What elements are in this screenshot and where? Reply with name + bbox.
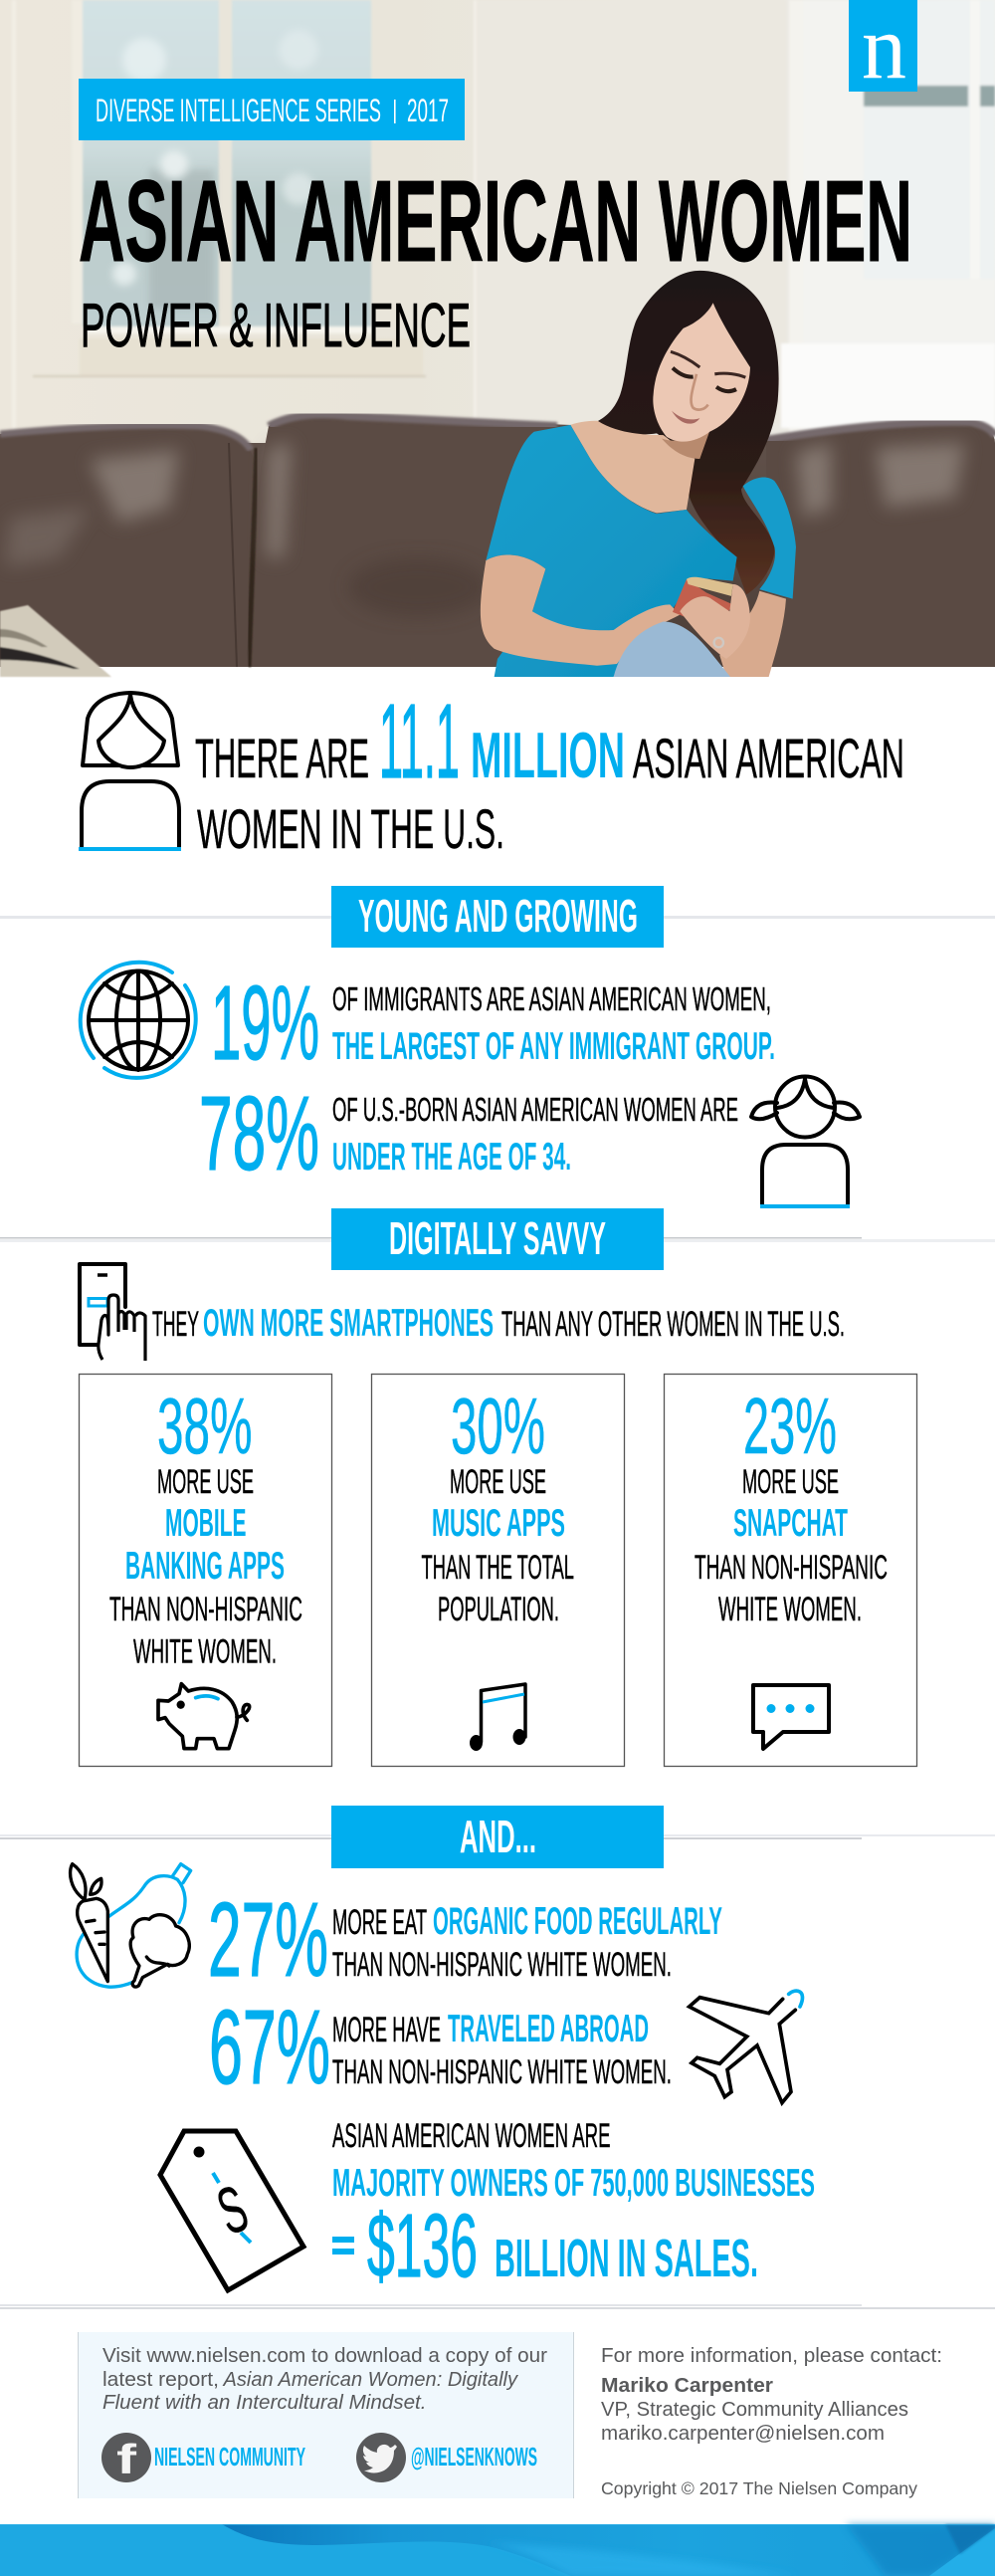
contact details: mariko.carpenter@nielsen.com [601, 2423, 885, 2445]
section header: digitally savvy: DIGITALLY SAVVY [389, 1212, 606, 1264]
stat: 78 percent under 34: UNDER THE AGE OF 34. [332, 1136, 571, 1179]
card: mobile banking: MOBILE [165, 1502, 247, 1545]
card: mobile banking: THAN NON-HISPANIC [109, 1591, 302, 1628]
panel: report link and social: Asian American Women: Digitally [222, 2369, 518, 2391]
sofa [0, 414, 995, 667]
contact details [601, 2345, 942, 2498]
leather highlights [5, 443, 965, 567]
panel: report link and social: @NIELSENKNOWS [411, 2442, 537, 2471]
card: music apps: POPULATION. [438, 1591, 559, 1628]
series badge [79, 79, 465, 140]
icon: music notes [470, 1684, 525, 1751]
card: music apps [372, 1374, 625, 1766]
icon: piggy bank [158, 1684, 250, 1749]
smartphones statement: OWN MORE SMARTPHONES [203, 1302, 494, 1345]
card: snapchat [665, 1374, 917, 1766]
headline: 11.1 million: THERE ARE [195, 727, 369, 789]
card: snapchat: SNAPCHAT [733, 1502, 848, 1545]
panel: report link and social: NIELSEN COMMUNITY [154, 2442, 305, 2471]
section header: and: AND... [460, 1811, 536, 1862]
icon: price tag: S [208, 2171, 257, 2249]
stat: 67 percent traveled abroad [209, 1989, 672, 2106]
statement: business owners: ASIAN AMERICAN WOMEN ARE [332, 2117, 611, 2155]
contact details: VP, Strategic Community Alliances [601, 2399, 908, 2421]
section header: young and growing: YOUNG AND GROWING [358, 890, 638, 942]
stat: 27 percent organic food: MORE EAT [332, 1903, 427, 1942]
card: mobile banking: BANKING APPS [125, 1545, 285, 1588]
card: music apps: 30% [451, 1382, 545, 1470]
headline: 11.1 million: 11.1 [379, 683, 460, 800]
icon: hand on smartphone [80, 1264, 145, 1361]
section header: young and growing [331, 886, 664, 948]
icon: chat bubble [753, 1685, 829, 1749]
panel: report link and social: Visit www.nielsen.com to download a copy of our [102, 2345, 547, 2367]
window bokeh [96, 30, 318, 309]
footer band [0, 2524, 995, 2576]
hero photo: woman on a sofa [0, 0, 995, 677]
smartphones statement: THEY [152, 1305, 199, 1344]
statement: business owners: BILLION IN SALES. [495, 2229, 758, 2288]
card: mobile banking: MORE USE [157, 1463, 254, 1501]
series badge: DIVERSE INTELLIGENCE SERIES [96, 93, 381, 128]
icon: vegetables [71, 1864, 191, 1987]
contact details: Mariko Carpenter [601, 2375, 773, 2397]
section header: digitally savvy [331, 1208, 664, 1270]
icon: facebook: f [116, 2436, 137, 2482]
stat: 78 percent under 34 [199, 1075, 738, 1192]
card: mobile banking [80, 1374, 332, 1766]
pillow [0, 605, 111, 677]
nielsen logo [849, 0, 917, 98]
headline: 11.1 million [195, 683, 904, 860]
stat: 19 percent immigrants: 19% [211, 965, 319, 1082]
stat: 78 percent under 34: 78% [199, 1075, 319, 1192]
section header: and [331, 1806, 664, 1868]
card: snapchat: WHITE WOMEN. [718, 1591, 862, 1628]
icon: twitter [356, 2433, 406, 2482]
statement: business owners [332, 2117, 815, 2296]
card: music apps: THAN THE TOTAL [422, 1549, 574, 1587]
card: mobile banking: WHITE WOMEN. [133, 1632, 277, 1670]
stat: 67 percent traveled abroad: MORE HAVE [332, 2011, 441, 2049]
icon: woman [79, 693, 181, 851]
icon: facebook [101, 2433, 151, 2482]
stat: 19 percent immigrants [211, 965, 775, 1082]
card: mobile banking: 38% [157, 1382, 253, 1470]
panel: report link and social: latest report, [102, 2369, 219, 2391]
card: snapchat: MORE USE [742, 1463, 839, 1501]
headline: 11.1 million: WOMEN IN THE U.S. [197, 797, 504, 860]
card: snapchat: 23% [743, 1382, 837, 1470]
icon: girl [751, 1077, 860, 1208]
card: music apps: MORE USE [450, 1463, 546, 1501]
panel: report link and social [78, 2332, 574, 2498]
stat: 67 percent traveled abroad: THAN NON-HISPANIC WHITE WOMEN. [332, 2053, 672, 2091]
panel: report link and social: Fluent with an Intercultural Mindset. [102, 2392, 426, 2414]
stat: 67 percent traveled abroad: TRAVELED ABROAD [448, 2008, 649, 2050]
contact details: Copyright © 2017 The Nielsen Company [601, 2478, 917, 2498]
icon: globe [81, 963, 196, 1078]
stat: 27 percent organic food [208, 1881, 722, 1999]
icon: airplane [690, 1991, 802, 2103]
statement: business owners: $136 [367, 2197, 478, 2296]
headline: 11.1 million: MILLION [471, 719, 625, 791]
icon: price tag [160, 2131, 303, 2290]
woman [481, 271, 796, 677]
card: music apps: MUSIC APPS [432, 1502, 565, 1545]
subtitle: POWER & INFLUENCE [81, 292, 471, 360]
series badge: 2017 [407, 93, 449, 128]
stat: 27 percent organic food: ORGANIC FOOD REGULARLY [433, 1900, 722, 1943]
stat: 27 percent organic food: THAN NON-HISPANIC WHITE WOMEN. [332, 1946, 672, 1984]
contact details: For more information, please contact: [601, 2345, 942, 2367]
stat: 67 percent traveled abroad: 67% [209, 1989, 330, 2106]
stat: 27 percent organic food: 27% [208, 1881, 328, 1999]
